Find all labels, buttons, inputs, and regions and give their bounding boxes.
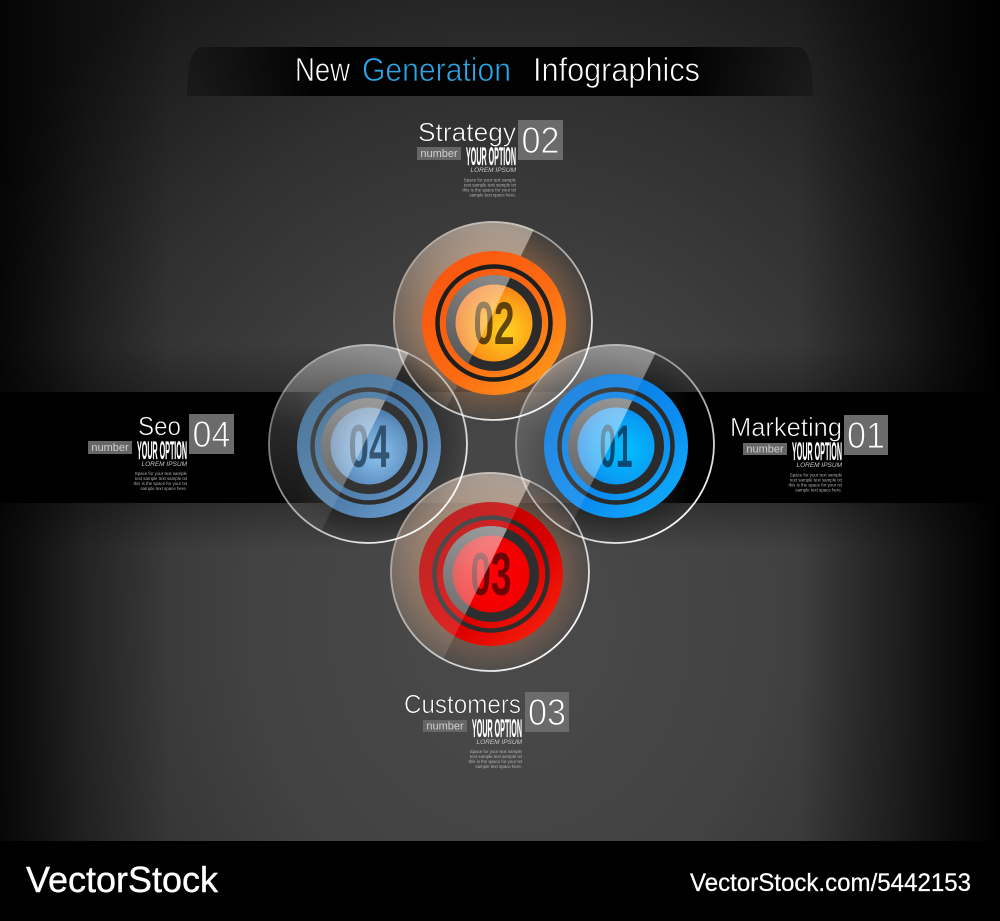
label: 01 Marketing: Marketing [730, 412, 842, 442]
title [295, 51, 700, 88]
label: 03 Customers: Space for your text sample [470, 749, 523, 754]
glass button 04 steel blue [268, 344, 457, 531]
label: 03 Customers: Customers [404, 689, 521, 719]
label: 04 Seo: text sample text sample txt [135, 476, 188, 481]
label: 02 Strategy: text sample text sample txt [464, 182, 517, 188]
label: 02 Strategy: number [420, 148, 458, 160]
label: 02 Strategy: Strategy [418, 117, 516, 147]
number: 03 [470, 541, 512, 608]
label: 04 Seo: LOREM IPSUM [141, 461, 188, 468]
label: 02 Strategy: sample text space here. [469, 192, 516, 198]
label: 02 Strategy: YOUR OPTION [466, 143, 516, 171]
label: 01 Marketing: this is the space for your txt [789, 482, 843, 488]
disc glare [419, 502, 518, 636]
label: 02 Strategy: Space for your text sample [464, 178, 517, 182]
label: 01 Marketing: number [746, 444, 784, 456]
label: 03 Customers [404, 689, 569, 769]
inner glare [446, 275, 510, 364]
title: Generation [362, 51, 511, 88]
label: 01 Marketing: sample text space here. [795, 488, 842, 492]
label: 04 Seo: YOUR OPTION [137, 437, 187, 465]
label: 02 Strategy: this is the space for your txt [463, 188, 517, 192]
label: 04 Seo [88, 411, 234, 491]
label: 02 Strategy: LOREM IPSUM [470, 167, 517, 174]
number box [189, 414, 234, 454]
watermark right: VectorStock.com/5442153 [690, 869, 971, 897]
label: 01 Marketing [730, 412, 888, 492]
number: 02 [474, 290, 514, 357]
disc [544, 374, 688, 518]
label: 03 Customers: 03 [528, 692, 566, 733]
label: 04 Seo: number [91, 442, 129, 454]
footer bar [0, 841, 1000, 921]
title bar [187, 47, 813, 96]
number box [518, 120, 563, 160]
label: 04 Seo: Space for your text sample [135, 471, 188, 476]
title: New [295, 51, 350, 88]
label: 01 Marketing: Space for your text sample [790, 472, 843, 478]
label: 04 Seo: Seo [138, 411, 181, 441]
label: 04 Seo: this is the space for your txt [134, 481, 188, 486]
glass button 03 red [390, 472, 590, 672]
number box [525, 692, 569, 732]
disc [419, 502, 563, 646]
label: 01 Marketing: LOREM IPSUM [796, 462, 843, 469]
label: 03 Customers: sample text space here. [475, 764, 522, 769]
label: 03 Customers: text sample text sample txt [470, 754, 523, 759]
label: 01 Marketing: YOUR OPTION [792, 438, 842, 466]
label: 01 Marketing: text sample text sample txt [790, 478, 843, 482]
glass rims [269, 222, 714, 671]
label: 03 Customers: LOREM IPSUM [476, 739, 523, 746]
glass button 01 blue [515, 344, 688, 532]
disc glare [297, 374, 396, 508]
label: 01 Marketing: 01 [847, 415, 885, 456]
label: 03 Customers: number [426, 720, 464, 732]
label: 03 Customers: this is the space for your txt [469, 759, 523, 764]
label: 03 Customers: YOUR OPTION [472, 715, 522, 743]
label: 02 Strategy: 02 [522, 120, 560, 161]
disc [422, 251, 566, 395]
horizontal black band [0, 345, 1000, 550]
watermark left: VectorStock [26, 859, 219, 900]
number box [844, 415, 888, 455]
label: 04 Seo: 04 [192, 414, 230, 455]
title: Infographics [533, 51, 700, 88]
number: 04 [348, 413, 390, 480]
disc [297, 374, 441, 518]
disc glare [544, 374, 642, 508]
label: 04 Seo: sample text space here. [140, 486, 187, 491]
label: 02 Strategy [417, 117, 563, 198]
glass button 02 orange [393, 221, 593, 421]
glass button 01 blue: 01 [600, 413, 632, 480]
